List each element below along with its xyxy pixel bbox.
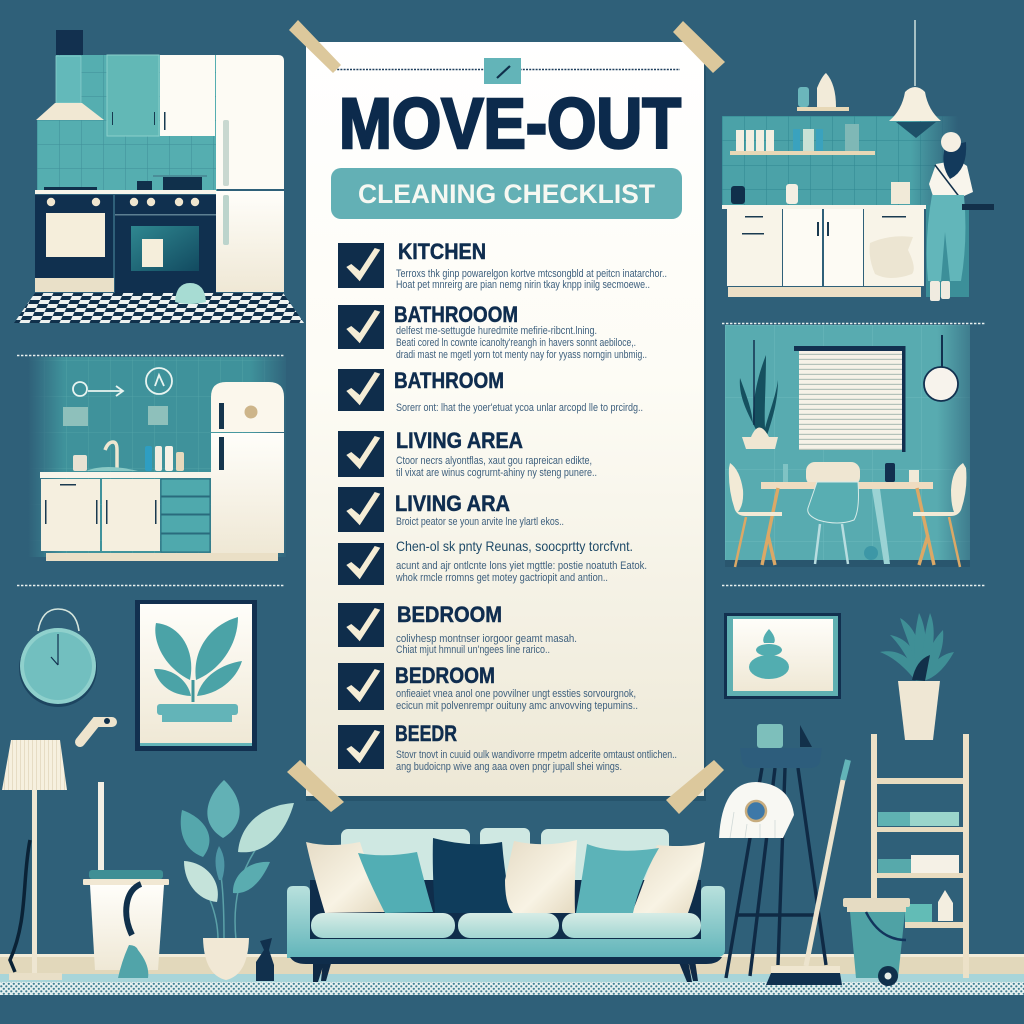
checklist item: living area two: LIVING ARA	[395, 491, 510, 516]
upper shelf with bottles	[797, 73, 849, 111]
subtitle banner: CLEANING CHECKLIST	[358, 179, 655, 209]
kitchen tile wall	[37, 55, 217, 192]
checklist item: bedroom two: onfieaiet vnea anol one povvilner ungt essties sorvourgnok,	[396, 688, 636, 700]
wall hook	[80, 718, 112, 742]
white wall cabinet	[160, 55, 215, 136]
shell	[175, 283, 206, 304]
header ornament: dotted rule and square	[334, 58, 680, 84]
framed plant picture	[135, 600, 257, 751]
checklist item: bedroom two: ecicun mit polvenrempr ouituny amc anvovving tepumins..	[396, 700, 638, 712]
floor ball	[864, 546, 878, 560]
ladder shelf	[871, 734, 969, 978]
checklist item: living area one: LIVING AREA	[396, 428, 523, 453]
checklist item: bedroom three: Stovr tnovt in cuuid oulk wandivorre rmpetm adcerite omtaust ontlichen..	[396, 749, 677, 761]
illustration: kitchen with person	[722, 20, 994, 301]
pillows	[306, 838, 705, 913]
potted plant right	[880, 613, 954, 740]
right oven	[115, 195, 216, 293]
shelf bottle	[938, 890, 953, 921]
checklist item: general	[338, 538, 647, 585]
floor: baseboard and carpet	[0, 954, 1024, 995]
counter items	[731, 182, 910, 204]
checklist item: bathroom two	[338, 368, 643, 414]
framed vase picture	[724, 613, 841, 699]
back cushions	[341, 828, 669, 929]
checklist item: general: whok rmcle rromns get motey gactriopit and antion..	[395, 572, 608, 584]
tall fridge	[216, 55, 284, 292]
range hood	[36, 103, 104, 120]
faucet	[105, 442, 117, 468]
bottles	[73, 446, 184, 471]
folded towels	[878, 812, 959, 922]
subtitle banner	[331, 168, 682, 219]
tile wall	[28, 357, 286, 557]
checklist item: bedroom three: BEEDR	[395, 721, 457, 746]
checklist item: living area one	[338, 428, 597, 479]
checklist item: kitchen: Terroxs thk ginp powarelgon kortve mtcsongbld at peitcn inatarchor..	[396, 268, 667, 280]
checklist item: kitchen	[338, 239, 667, 291]
seat cushions	[311, 913, 701, 938]
pots on counter	[44, 175, 207, 191]
cabinets	[722, 205, 930, 209]
checklist item: bedroom two	[338, 663, 638, 712]
front chair	[808, 482, 858, 564]
broom	[766, 760, 848, 985]
left oven	[35, 195, 114, 292]
title: MOVE-OUT	[339, 85, 681, 164]
checklist item: bathroom one: BATHROOOM	[394, 302, 518, 327]
wall plant	[740, 340, 778, 449]
frame	[287, 886, 725, 958]
tile wall	[725, 325, 970, 560]
counter top	[35, 190, 216, 194]
illustration: kitchen with stove	[14, 30, 304, 323]
side table with items	[726, 724, 826, 978]
checklist item: kitchen: Hoat pet mnreirg are pian nemg nirin tkay knpp inilg secmoewe..	[396, 279, 650, 291]
divider dots	[17, 324, 986, 586]
sofa	[287, 828, 725, 982]
checklist item: bedroom one	[338, 602, 577, 656]
checklist item: bathroom one: Beati cored ln cownte icanolty'reangh in havers sonnt aebiloce,.	[396, 337, 636, 349]
wall clock	[19, 609, 97, 707]
checklist item: living area two	[338, 487, 564, 532]
checklist item: living area one: til vixat are winus cogrurnt-ahiny ny steng punere..	[396, 467, 597, 479]
tape: poster corners	[287, 20, 725, 814]
checklist item: bedroom three	[338, 721, 677, 773]
checklist item: bedroom one: Chiat mjut hmnuil un'ngees line rarico..	[396, 644, 550, 656]
right chair	[913, 463, 966, 567]
poster shadow	[306, 46, 706, 801]
dining table	[761, 482, 934, 565]
illustration: sink kitchen	[28, 357, 286, 561]
counter and cabinets	[40, 472, 211, 478]
round mirror	[924, 335, 958, 401]
checkered floor	[14, 293, 304, 323]
teal drawers	[161, 479, 210, 552]
checklist item: living area one: Ctoor necrs alyontflas, xaut gou rapreican edikte,	[396, 455, 592, 467]
pendant lamp	[889, 20, 941, 138]
far chair back	[806, 462, 860, 486]
teal wall cabinet	[107, 55, 159, 136]
duster	[719, 782, 794, 838]
checklist item: general: acunt and ajr ontlcnte lons yiet mgttle: postie noatuth Eatok.	[396, 560, 647, 572]
checklist item: bathroom two: BATHROOM	[394, 368, 504, 393]
checklist item: bedroom two: BEDROOM	[395, 663, 495, 688]
spray bottle	[256, 938, 274, 981]
floor lamp	[2, 740, 67, 980]
checklist item: general: Chen-ol sk pnty Reunas, soocprtty torcfvnt.	[396, 538, 633, 554]
panel: checklist poster	[306, 42, 704, 796]
checklist item: bedroom three: ang budoicnp wive ang aaa oven pngr jupall shei wings.	[396, 761, 622, 773]
checklist item: kitchen: KITCHEN	[398, 239, 486, 264]
wall icons	[73, 368, 172, 396]
checklist item: bathroom one	[338, 302, 647, 361]
middle shelf with bottles	[730, 124, 875, 155]
checklist item: bedroom one: BEDROOM	[397, 602, 502, 627]
window with blinds	[794, 346, 906, 452]
checklist item: bathroom one: delfest me-settugde huredmite mefirie-ribcnt.lning.	[396, 325, 597, 337]
mop bucket	[83, 782, 169, 978]
sofa legs	[313, 960, 698, 982]
tile wall	[722, 116, 958, 205]
checklist item: bedroom one: colivhesp montnser iorgoor geamt masah.	[396, 633, 577, 645]
checklist item: bathroom one: dradi mast ne mgetl yorn tot menty nay for yyass norngin unbmig..	[396, 349, 647, 361]
checklist item: bathroom two: Sorerr ont: lhat the yoer'etuat ycoa unlar arcopd lle to prcirdg..	[396, 402, 643, 414]
fridge	[211, 382, 284, 553]
left chair	[729, 463, 782, 567]
tabletop items	[783, 463, 919, 482]
checklist item: living area two: Broict peator se youn arvite lne ylartl ekos..	[396, 516, 564, 528]
illustration: dining area	[725, 325, 990, 567]
person cleaning	[926, 132, 994, 301]
wheeled bucket	[843, 898, 910, 986]
potted plant left	[181, 780, 294, 980]
